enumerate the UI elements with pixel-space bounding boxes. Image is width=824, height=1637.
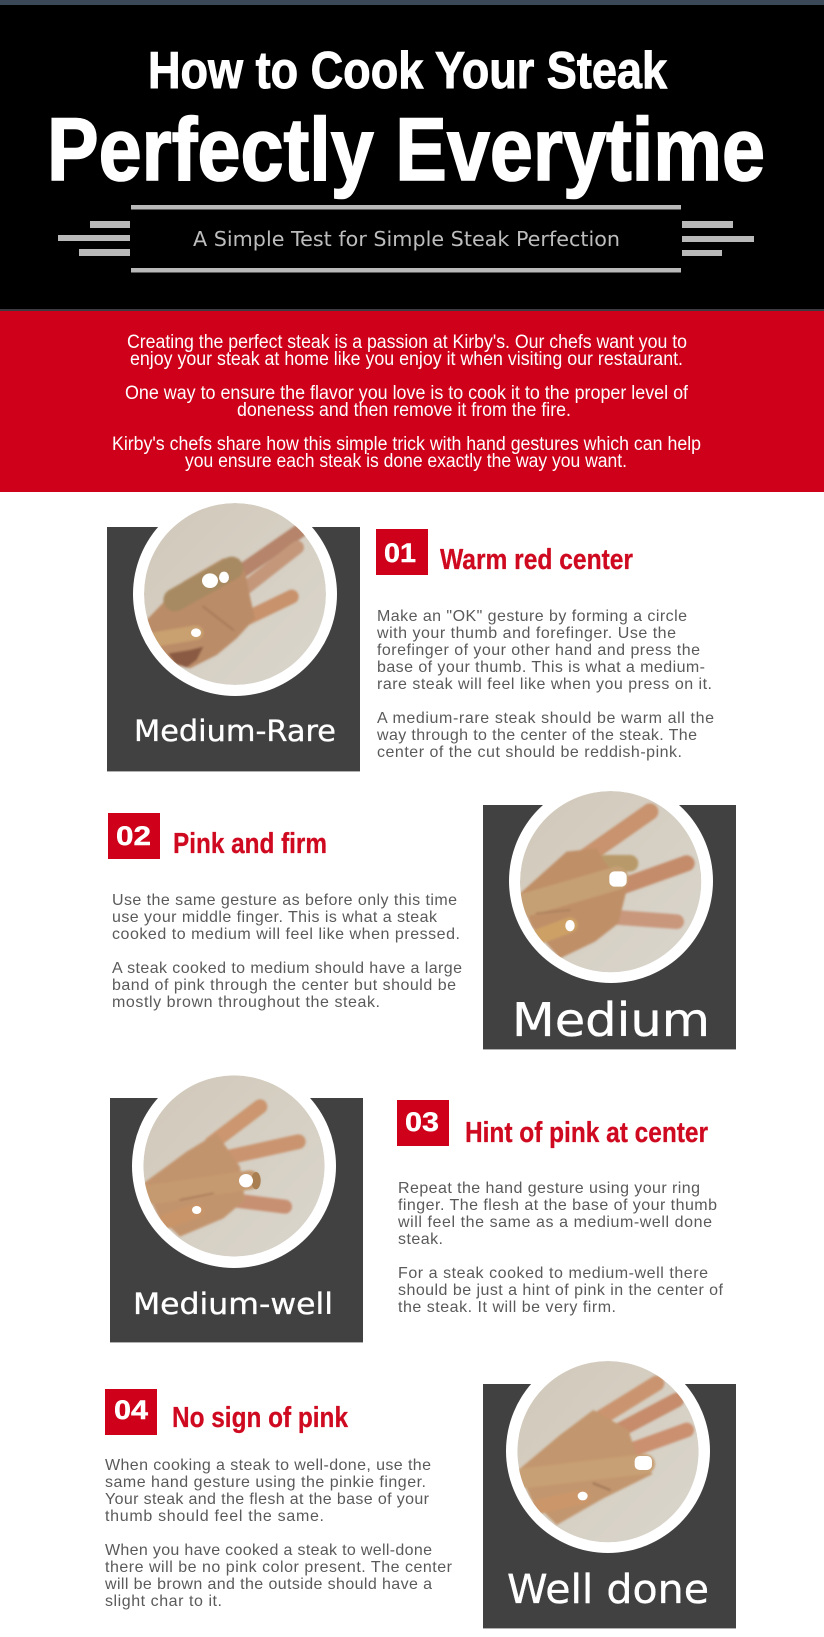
panel: well done card (483, 1349, 736, 1629)
description 01: with your thumb and forefinger. Use the (376, 625, 676, 642)
description 04: will be brown and the outside should have a (104, 1576, 432, 1593)
number badge 01 (376, 529, 428, 575)
number badge 04: 04 (114, 1395, 148, 1425)
description 04: Your steak and the flesh at the base of your (105, 1491, 430, 1508)
description 03: steak. (398, 1231, 443, 1248)
number badge 04 (105, 1389, 157, 1435)
number badge 03: 03 (405, 1107, 439, 1137)
heading: no sign of pink: No sign of pink (172, 1402, 348, 1434)
icon: hand gesture pinkie finger (517, 1361, 699, 1542)
heading: pink and firm: Pink and firm (173, 828, 327, 860)
label: Medium-Rare: Medium-Rare (134, 714, 336, 748)
label: Well done: Well done (507, 1567, 709, 1613)
subtitle banner (58, 205, 754, 272)
label: Medium-well: Medium-well (133, 1287, 333, 1321)
title: How to Cook Your Steak (148, 42, 667, 100)
description 04: When cooking a steak to well-done, use the (105, 1457, 431, 1474)
heading: hint of pink at center: Hint of pink at center (465, 1117, 708, 1149)
description 01: center of the cut should be reddish-pink. (377, 744, 682, 761)
description 04: same hand gesture using the pinkie finger. (105, 1474, 426, 1491)
label: Medium: Medium (512, 993, 710, 1047)
description 04: there will be no pink color present. The center (105, 1559, 453, 1576)
description 01 (376, 608, 714, 761)
description 02: band of pink through the center but should be (112, 977, 456, 994)
description 03: should be just a hint of pink in the center of (398, 1282, 724, 1299)
intro panel (0, 311, 824, 492)
description 02: mostly brown throughout the steak. (112, 994, 380, 1011)
description 03: will feel the same as a medium-well done (397, 1214, 712, 1231)
description 01: way through to the center of the steak. The (376, 727, 697, 744)
step 01 text (376, 529, 714, 761)
description 02: A steak cooked to medium should have a large (112, 960, 462, 977)
step 03 text (397, 1100, 724, 1316)
panel: medium-rare card (107, 492, 360, 772)
description 03: For a steak cooked to medium-well there (398, 1265, 708, 1282)
description 02 (112, 892, 462, 1011)
number badge 02: 02 (116, 821, 151, 851)
header band (0, 0, 824, 311)
heading: warm red center: Warm red center (440, 544, 633, 576)
panel: medium card (483, 779, 736, 1050)
icon: hand gesture forefinger (144, 503, 326, 685)
description 01: A medium-rare steak should be warm all the (377, 710, 714, 727)
step 02 text (108, 813, 462, 1011)
number badge 03 (397, 1100, 449, 1146)
icon: hand gesture middle finger (518, 791, 701, 972)
title (47, 42, 765, 199)
description 03: finger. The flesh at the base of your thumb (398, 1197, 717, 1214)
description 04: When you have cooked a steak to well-done (105, 1542, 432, 1559)
intro panel: One way to ensure the flavor you love is to cook it to the proper level of (125, 383, 689, 404)
description 02: Use the same gesture as before only this time (112, 892, 457, 909)
number badge 01: 01 (384, 538, 416, 568)
subtitle banner: A Simple Test for Simple Steak Perfection (193, 227, 620, 251)
description 01: forefinger of your other hand and press the (377, 642, 700, 659)
description 03: Repeat the hand gesture using your ring (398, 1180, 700, 1197)
intro panel: enjoy your steak at home like you enjoy it when visiting our restaurant. (130, 349, 683, 370)
description 01: Make an "OK" gesture by forming a circle (377, 608, 687, 625)
description 04 (104, 1457, 453, 1610)
panel: medium-well card (110, 1064, 363, 1343)
number badge 02 (108, 813, 160, 859)
description 04: thumb should feel the same. (105, 1508, 324, 1525)
description 03 (397, 1180, 724, 1316)
intro panel: Creating the perfect steak is a passion at Kirby's. Our chefs want you to (127, 332, 687, 353)
intro panel: Kirby's chefs share how this simple trick with hand gestures which can help (112, 434, 701, 455)
description 01: base of your thumb. This is what a medium- (377, 659, 705, 676)
intro panel: doneness and then remove it from the fire. (237, 400, 571, 421)
icon: hand gesture ring finger (143, 1075, 325, 1257)
description 03: the steak. It will be very firm. (398, 1299, 616, 1316)
description 01: rare steak will feel like when you press on it. (377, 676, 712, 693)
description 02: cooked to medium will feel like when pressed. (112, 926, 460, 943)
description 04: slight char to it. (105, 1593, 222, 1610)
step 04 text (104, 1389, 453, 1610)
intro panel: you ensure each steak is done exactly the way you want. (185, 451, 627, 472)
description 02: use your middle finger. This is what a steak (112, 909, 438, 926)
